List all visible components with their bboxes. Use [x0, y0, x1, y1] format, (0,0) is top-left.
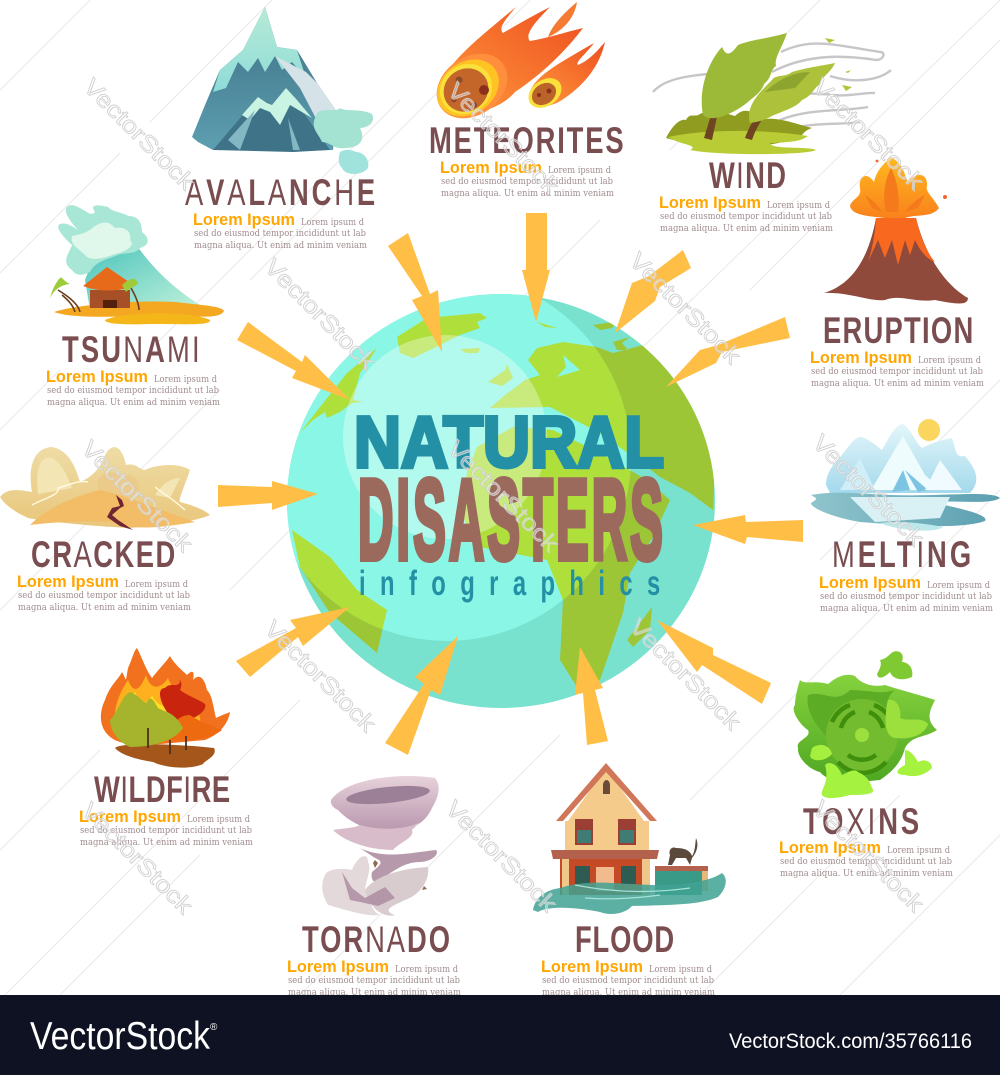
text block: sed do eiusmod tempor incididunt ut lab — [47, 385, 219, 396]
heading: WIND — [709, 155, 786, 196]
title line: NATURAL: NATURAL — [354, 403, 664, 483]
title line: DISASTERS: DISASTERS — [358, 456, 663, 584]
arrow: toxins — [657, 620, 771, 704]
text block: sed do eiusmod tempor incididunt ut lab — [660, 211, 832, 222]
icon: meteors — [424, 2, 605, 132]
arrow: flood — [575, 647, 608, 745]
icon: cracked earth and dust — [0, 447, 210, 530]
footer logo: VectorStock — [30, 1015, 210, 1058]
text block: Lorem Ipsum — [287, 958, 389, 976]
icon: toxic cloud — [794, 651, 937, 798]
icon: volcano — [824, 157, 968, 304]
panel: toxins — [779, 651, 953, 879]
text block: Lorem Ipsum — [17, 573, 119, 591]
text block — [46, 368, 220, 408]
text block: Lorem Ipsum — [46, 368, 148, 386]
globe — [263, 273, 715, 708]
text block: magna aliqua. Ut enim ad minim veniam — [441, 188, 614, 199]
text block: sed do eiusmod tempor incididunt ut lab — [194, 228, 366, 239]
arrow: melting — [693, 515, 803, 544]
text block — [659, 194, 833, 234]
text block: sed do eiusmod tempor incididunt ut lab — [542, 975, 714, 986]
text block: magna aliqua. Ut enim ad minim veniam — [542, 987, 715, 998]
heading: AVALANCHE — [185, 172, 375, 213]
text block — [819, 574, 993, 614]
text block: Lorem Ipsum — [541, 958, 643, 976]
watermarks: VectorStock — [259, 253, 382, 375]
text block: Lorem Ipsum — [193, 211, 295, 229]
text block: Lorem ipsum d — [548, 165, 611, 176]
text block — [287, 958, 461, 998]
heading: CRACKED — [31, 534, 175, 575]
text block — [541, 958, 715, 998]
text block: magna aliqua. Ut enim ad minim veniam — [47, 397, 220, 408]
text block: Lorem ipsum d — [767, 200, 830, 211]
heading: TOXINS — [803, 801, 919, 842]
text block: Lorem Ipsum — [659, 194, 761, 212]
text block: Lorem ipsum d — [125, 579, 188, 590]
arrow: avalanche — [388, 233, 442, 352]
panel: meteorites — [424, 2, 624, 199]
arrow: wildfire — [236, 607, 350, 677]
watermarks: VectorStock — [440, 795, 563, 917]
text block: Lorem Ipsum — [810, 349, 912, 367]
text block: Lorem ipsum d — [301, 217, 364, 228]
title line: infographics: infographics — [359, 565, 660, 603]
watermarks: VectorStock — [807, 429, 930, 551]
text block: Lorem ipsum d — [918, 355, 981, 366]
arrow: eruption — [666, 317, 790, 387]
heading: TSUNAMI — [62, 329, 200, 370]
text block: Lorem ipsum d — [927, 580, 990, 591]
registered mark: ® — [210, 1022, 218, 1033]
text block: magna aliqua. Ut enim ad minim veniam — [18, 602, 191, 613]
text block: Lorem ipsum d — [395, 964, 458, 975]
text block: Lorem ipsum d — [154, 374, 217, 385]
text block: Lorem Ipsum — [819, 574, 921, 592]
watermarks: VectorStock — [624, 613, 747, 735]
panel: tornado — [287, 776, 461, 998]
heading: FLOOD — [575, 919, 674, 960]
panel: melting — [811, 419, 1000, 614]
panel: cracked — [0, 447, 210, 613]
watermarks: VectorStock — [259, 615, 382, 737]
panel: eruption — [810, 157, 984, 389]
watermarks: VectorStock — [78, 73, 201, 195]
text block — [17, 573, 191, 613]
icon: tsunami wave and hut — [50, 205, 224, 324]
watermarks: VectorStock — [76, 435, 199, 557]
panel: wind — [653, 33, 891, 234]
text block: Lorem ipsum d — [649, 964, 712, 975]
text block: magna aliqua. Ut enim ad minim veniam — [660, 223, 833, 234]
watermarks — [76, 73, 930, 919]
icon: flooded house — [533, 763, 726, 914]
text block: sed do eiusmod tempor incididunt ut lab — [780, 856, 952, 867]
title — [354, 403, 664, 603]
text block — [810, 349, 984, 389]
icon: trees in wind — [653, 33, 891, 154]
text block: Lorem ipsum d — [187, 814, 250, 825]
icon: melting glacier — [811, 419, 1000, 531]
footer bar — [0, 995, 1000, 1075]
heading: ERUPTION — [823, 310, 973, 351]
watermarks: VectorStock — [624, 247, 747, 369]
watermarks: VectorStock — [442, 435, 565, 557]
arrow: cracked — [218, 481, 318, 510]
text block — [193, 211, 367, 251]
text block: sed do eiusmod tempor incididunt ut lab — [288, 975, 460, 986]
arrows pointing at the globe — [218, 213, 803, 755]
text block — [440, 159, 614, 199]
text block — [79, 808, 253, 848]
text block: sed do eiusmod tempor incididunt ut lab — [441, 176, 613, 187]
text block: magna aliqua. Ut enim ad minim veniam — [780, 868, 953, 879]
watermarks: VectorStock — [807, 795, 930, 917]
watermarks: VectorStock — [807, 73, 930, 195]
footer url: VectorStock.com/35766116 — [729, 1030, 972, 1053]
text block: Lorem Ipsum — [79, 808, 181, 826]
watermarks: VectorStock — [76, 797, 199, 919]
icon: snowy mountain — [192, 7, 373, 174]
text block: magna aliqua. Ut enim ad minim veniam — [194, 240, 367, 251]
heading: METEORITES — [429, 120, 624, 161]
arrow: meteorites — [522, 213, 550, 322]
text block: sed do eiusmod tempor incididunt ut lab — [80, 825, 252, 836]
text block: Lorem ipsum d — [887, 845, 950, 856]
panel: avalanche — [185, 7, 375, 251]
panel: flood — [533, 763, 726, 998]
arrow: tsunami — [237, 322, 350, 400]
arrow: wind — [615, 250, 691, 333]
icon: burning bush — [101, 648, 230, 768]
panel: tsunami — [46, 205, 224, 408]
heading: MELTING — [832, 534, 971, 575]
text block: Lorem Ipsum — [440, 159, 542, 177]
text block: magna aliqua. Ut enim ad minim veniam — [288, 987, 461, 998]
text block: sed do eiusmod tempor incididunt ut lab — [18, 590, 190, 601]
text block: magna aliqua. Ut enim ad minim veniam — [80, 837, 253, 848]
watermarks: VectorStock — [442, 77, 565, 199]
heading: TORNADO — [302, 919, 450, 960]
heading: WILDFIRE — [94, 769, 230, 810]
arrow: tornado — [385, 636, 458, 755]
icon: tornado — [322, 776, 439, 916]
text block: Lorem Ipsum — [779, 839, 881, 857]
panel: wildfire — [79, 648, 253, 848]
text block — [779, 839, 953, 879]
